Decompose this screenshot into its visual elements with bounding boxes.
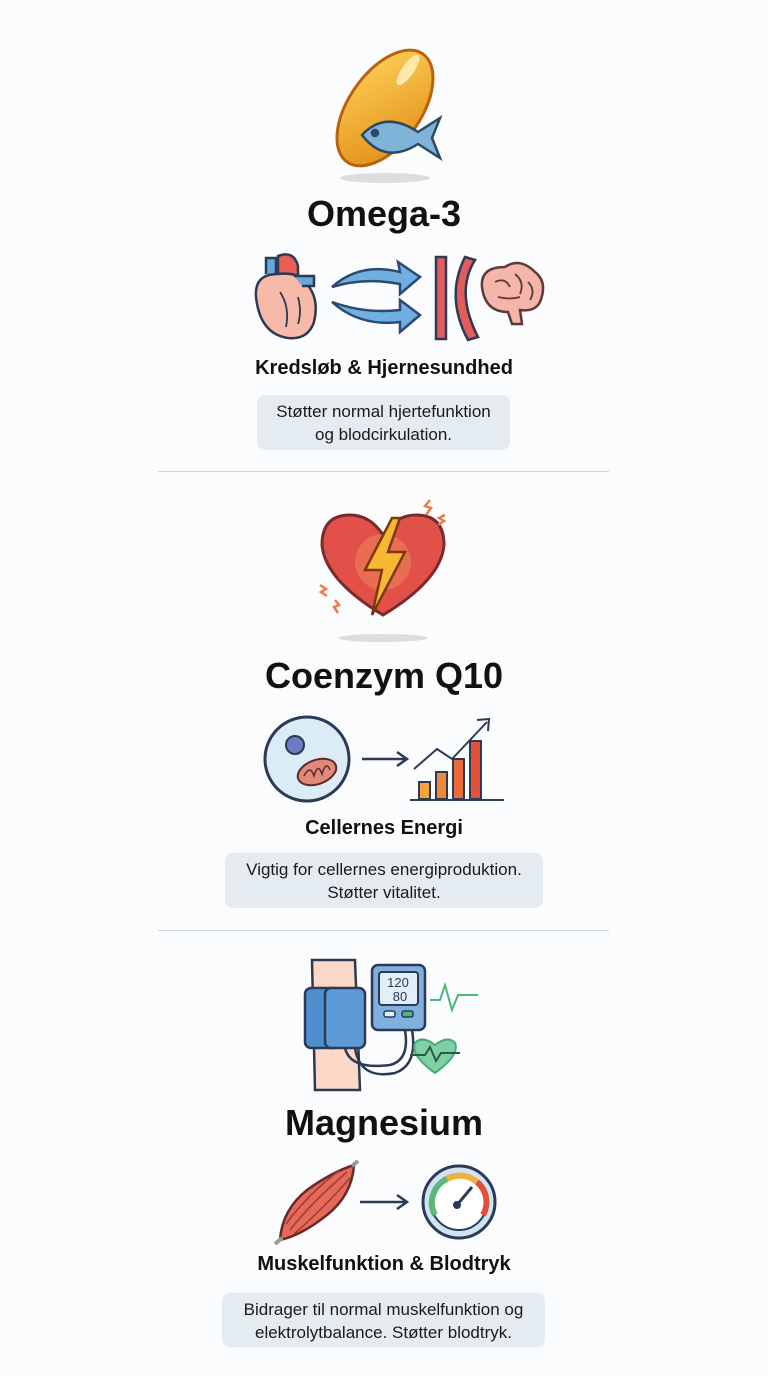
icon: fish oil capsule	[336, 48, 442, 183]
icon: heart with lightning	[318, 499, 446, 642]
text box: omega-3: Støtter normal hjertefunktion	[276, 402, 491, 421]
subheading: Muskelfunktion & Blodtryk: Muskelfunktion & Blodtryk	[257, 1253, 511, 1275]
icon: gauge	[423, 1166, 495, 1238]
text box: Q10: Støtter vitalitet.	[327, 883, 441, 902]
icon: blood pressure monitor: 120	[387, 975, 409, 990]
icon: cell with mitochondrion	[265, 717, 349, 801]
icon: circular arrows	[332, 262, 420, 332]
subheading: Kredsløb & Hjernesundhed: Kredsløb & Hjernesundhed	[255, 357, 513, 379]
icon: heart	[256, 254, 316, 338]
icon: bar chart	[410, 719, 504, 800]
text box: omega-3	[257, 395, 510, 450]
icon: blood vessel	[436, 257, 478, 340]
icons: muscle, arrow, gauge	[274, 1160, 496, 1245]
subheading: Cellernes Energi: Cellernes Energi	[305, 817, 463, 839]
icons: heart, arrows, vessel, brain	[254, 253, 544, 342]
title: Omega-3: Omega-3	[307, 193, 461, 234]
icon: blood pressure monitor	[304, 958, 478, 1092]
arrow	[362, 752, 407, 766]
text box: omega-3: og blodcirkulation.	[315, 425, 452, 444]
text box: Q10	[225, 853, 543, 908]
text box: magnesium: Bidrager til normal muskelfunktion og	[244, 1300, 523, 1319]
icons: cell, arrow, bar chart	[264, 716, 504, 802]
icon: blood pressure monitor: 80	[393, 989, 407, 1004]
text box: Q10: Vigtig for cellernes energiproduktion.	[246, 860, 522, 879]
icon: brain	[482, 263, 543, 324]
text box: magnesium	[222, 1293, 545, 1347]
icon: muscle	[275, 1161, 358, 1244]
text box: magnesium: elektrolytbalance. Støtter blodtryk.	[255, 1323, 512, 1342]
title: Coenzym Q10: Coenzym Q10	[265, 655, 503, 696]
arrow	[360, 1195, 407, 1209]
title: Magnesium: Magnesium	[285, 1102, 483, 1143]
